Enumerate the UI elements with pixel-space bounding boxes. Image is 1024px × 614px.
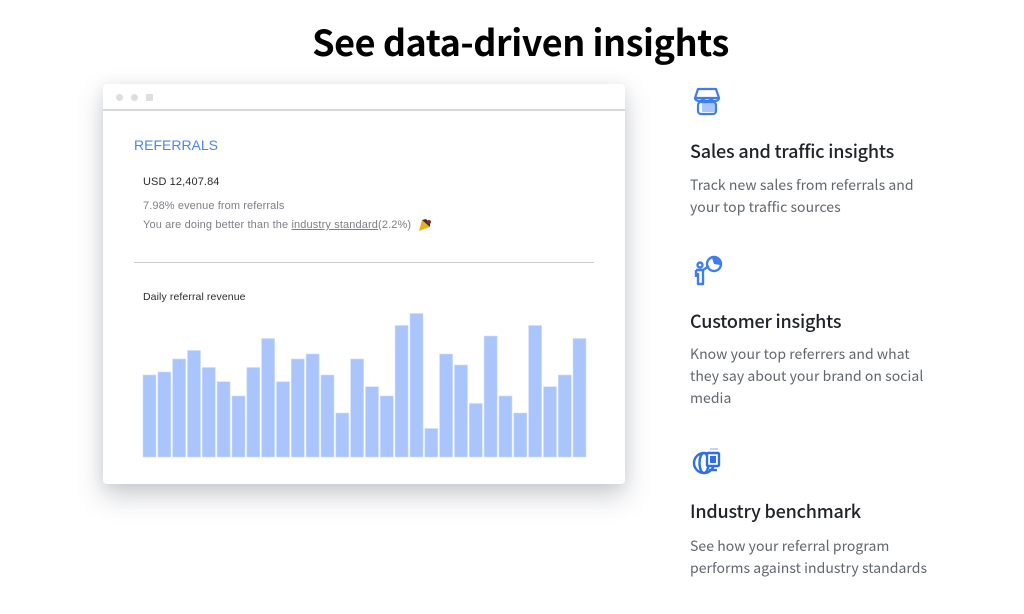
icon: party popper bbox=[419, 219, 431, 231]
panel heading: REFERRALS bbox=[134, 137, 218, 153]
icon: globe with chart bbox=[692, 448, 720, 474]
feature: industry benchmark bbox=[690, 448, 927, 578]
window title bar dots bbox=[116, 94, 153, 101]
bar chart: daily referral revenue bbox=[142, 313, 586, 458]
feature description bbox=[690, 175, 914, 217]
feature description: Track new sales from referrals and bbox=[690, 175, 914, 195]
icon: person with pie chart bbox=[694, 256, 722, 286]
panel: referrals browser window bbox=[103, 84, 625, 484]
feature: customer insights bbox=[690, 256, 923, 408]
feature heading: Sales and traffic insights bbox=[690, 138, 894, 164]
feature description: they say about your brand on social bbox=[690, 366, 923, 386]
comparison with industry standard: You are doing better than the industry standard(2.2%) bbox=[143, 219, 411, 231]
feature description bbox=[690, 344, 923, 408]
title: See data-driven insights bbox=[312, 15, 729, 67]
feature description: Know your top referrers and what bbox=[690, 344, 910, 364]
feature description: See how your referral program bbox=[690, 536, 889, 556]
icon: storefront bbox=[694, 88, 720, 116]
feature heading: Customer insights bbox=[690, 308, 841, 334]
feature: sales and traffic insights bbox=[690, 88, 914, 217]
feature description bbox=[690, 536, 927, 578]
feature description: media bbox=[690, 388, 731, 408]
feature heading: Industry benchmark bbox=[690, 498, 861, 524]
feature description: your top traffic sources bbox=[690, 197, 841, 217]
chart heading: Daily referral revenue bbox=[143, 291, 246, 303]
revenue amount: USD 12,407.84 bbox=[143, 176, 220, 188]
revenue percentage: 7.98% evenue from referrals bbox=[143, 200, 284, 212]
feature description: performs against industry standards bbox=[690, 558, 927, 578]
